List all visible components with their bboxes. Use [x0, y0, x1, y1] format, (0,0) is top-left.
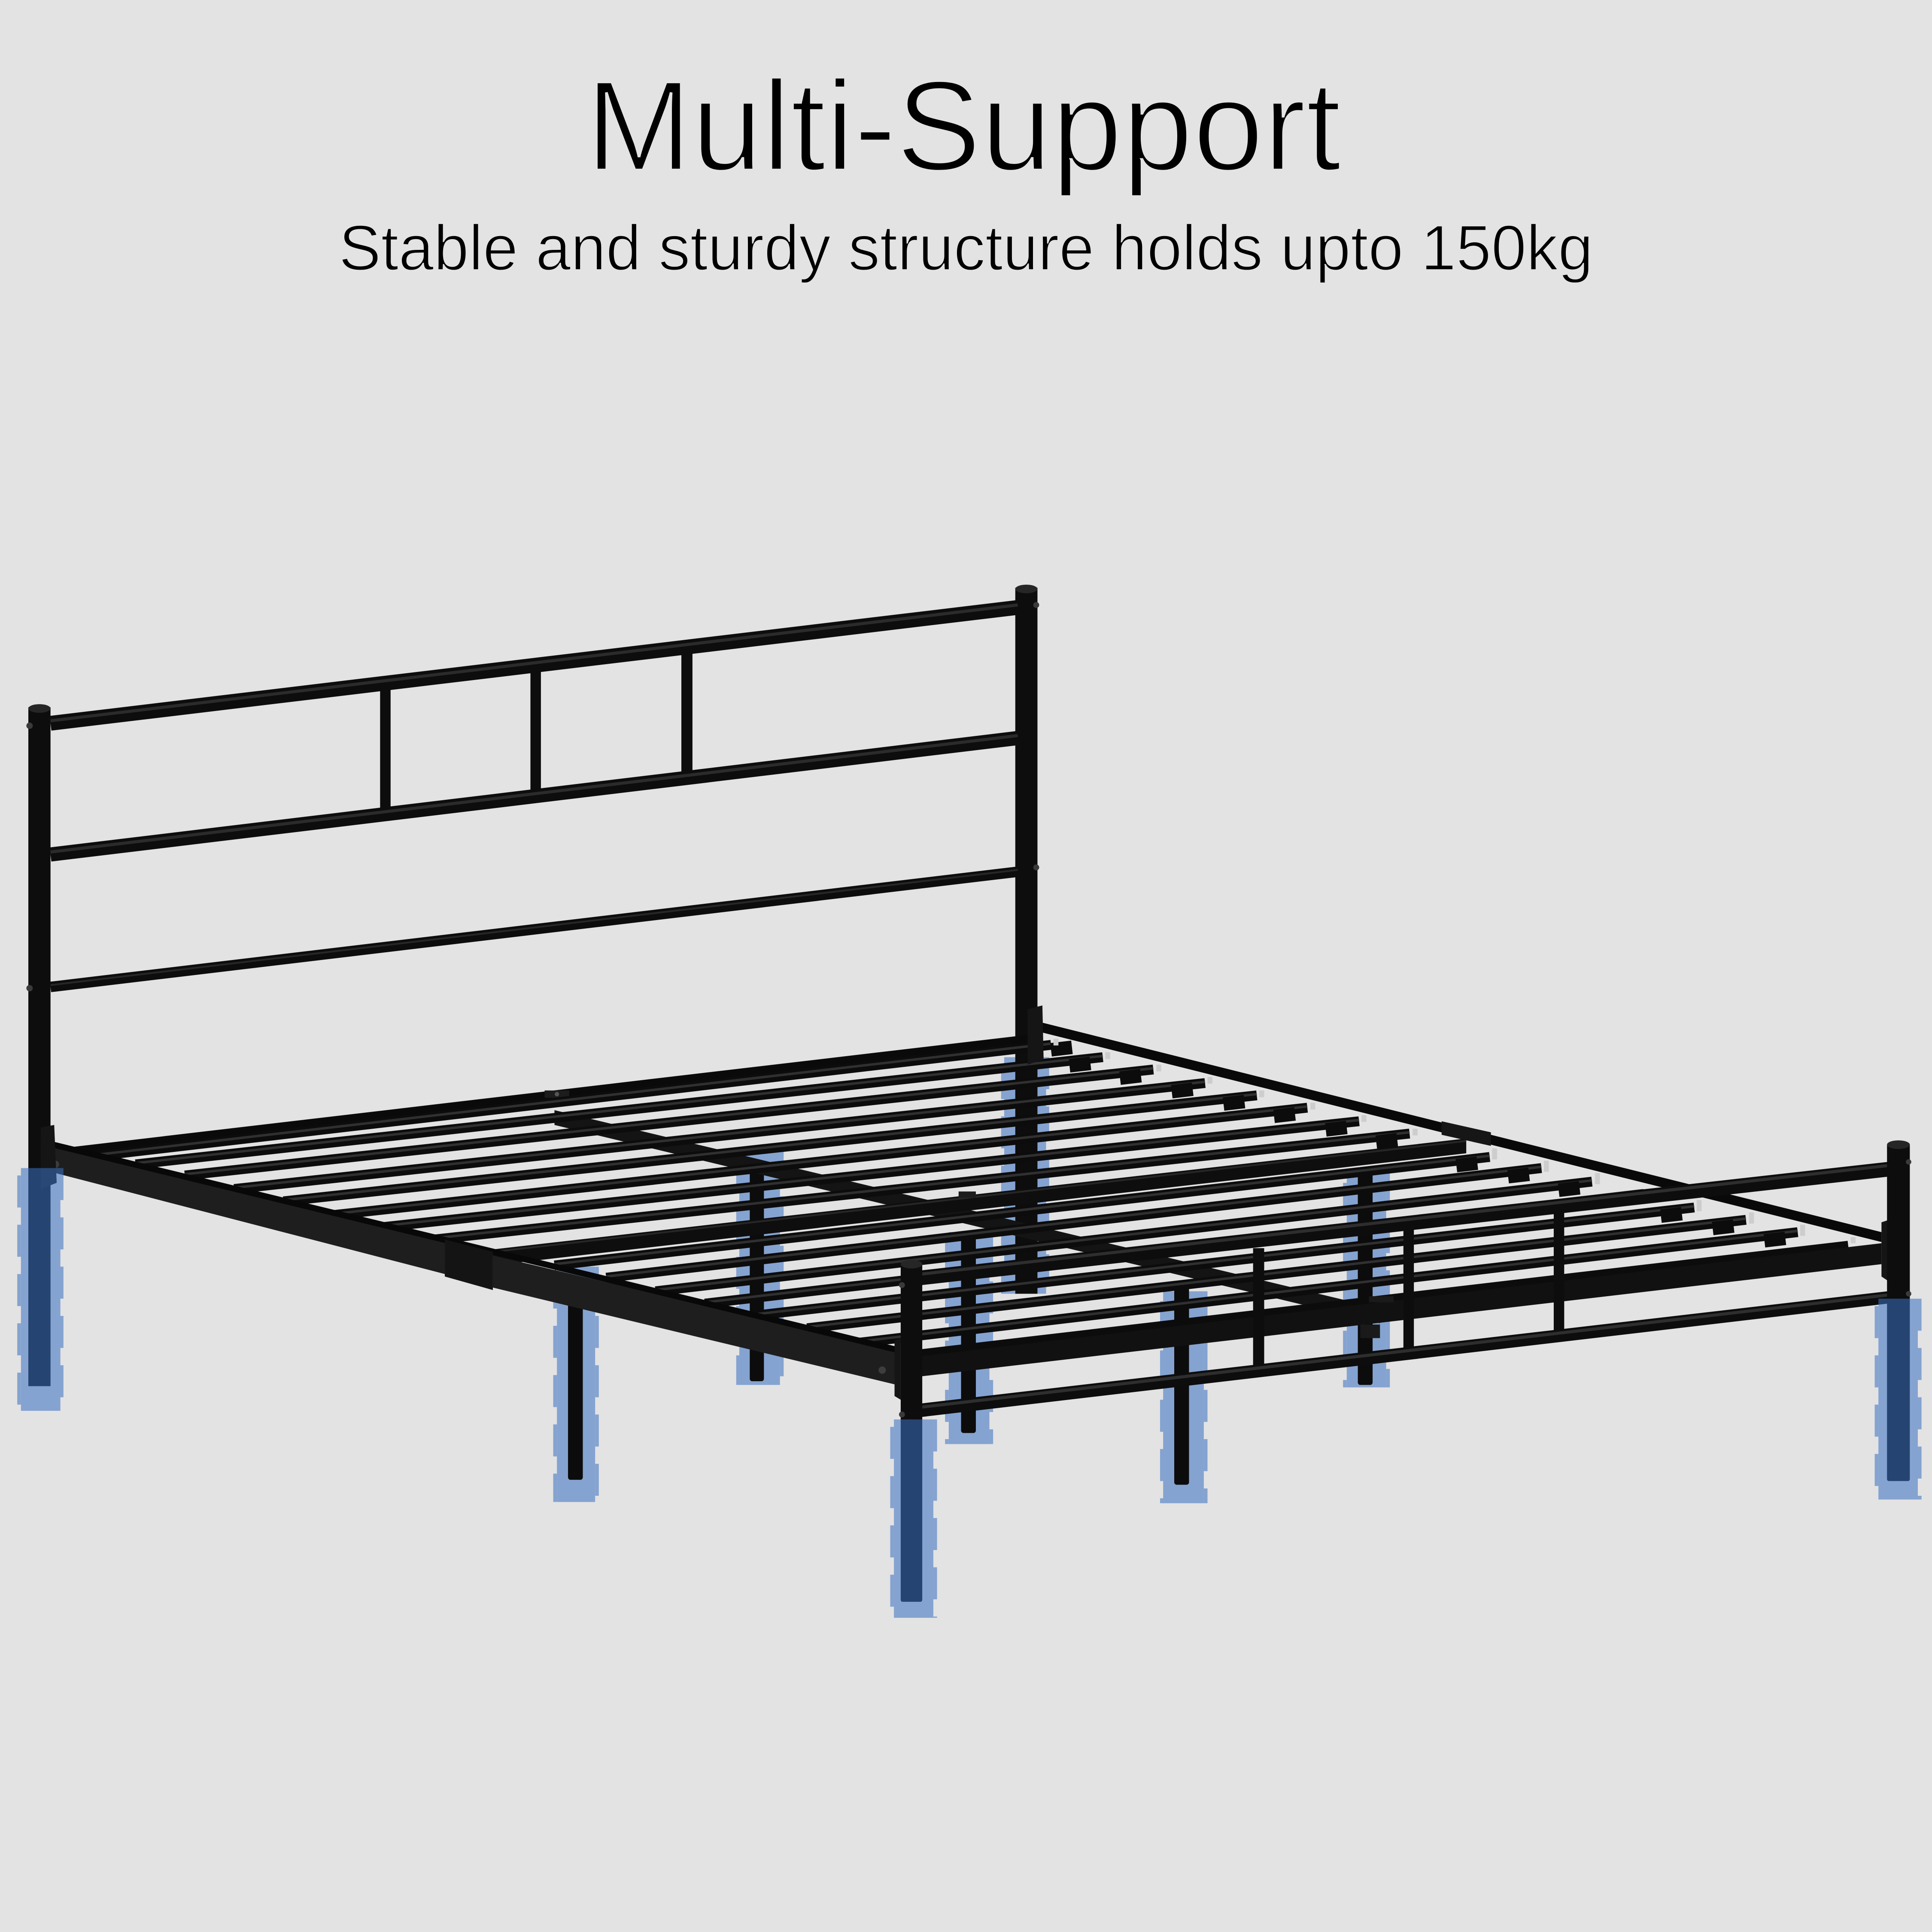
subtitle: Stable and sturdy structure holds upto 150kg — [339, 212, 1593, 284]
right footboard post — [1887, 1140, 1911, 1481]
inner leg highlights — [555, 1057, 1388, 1503]
slat texture — [99, 1044, 1798, 1342]
right side rail — [1042, 1023, 1881, 1242]
left headboard post — [26, 704, 51, 1386]
footboard — [899, 1140, 1911, 1602]
title: Multi-Support — [586, 55, 1342, 198]
footboard vertical bars — [1253, 1212, 1564, 1371]
rail joint sleeve — [445, 1239, 493, 1290]
corner brackets — [41, 1005, 1889, 1400]
inner legs — [568, 1170, 1373, 1485]
left side rail — [51, 1141, 897, 1385]
left footboard post — [899, 1260, 922, 1602]
headboard rails — [51, 605, 1018, 987]
footboard rails — [922, 1162, 1888, 1417]
center support beam — [554, 1110, 1380, 1323]
back rail of frame — [55, 1037, 1042, 1153]
headboard — [26, 585, 1039, 1386]
slat tabs — [1054, 1039, 1856, 1243]
slats — [99, 1045, 1848, 1354]
right headboard post — [1015, 585, 1039, 1294]
slat end flares — [1051, 1047, 1785, 1241]
middle cross beam — [493, 1139, 1466, 1265]
corner leg highlights — [19, 1168, 1920, 1618]
foot frame rail — [922, 1243, 1881, 1376]
bracket under foot rail — [1360, 1296, 1394, 1338]
headboard vertical bars — [380, 647, 693, 811]
